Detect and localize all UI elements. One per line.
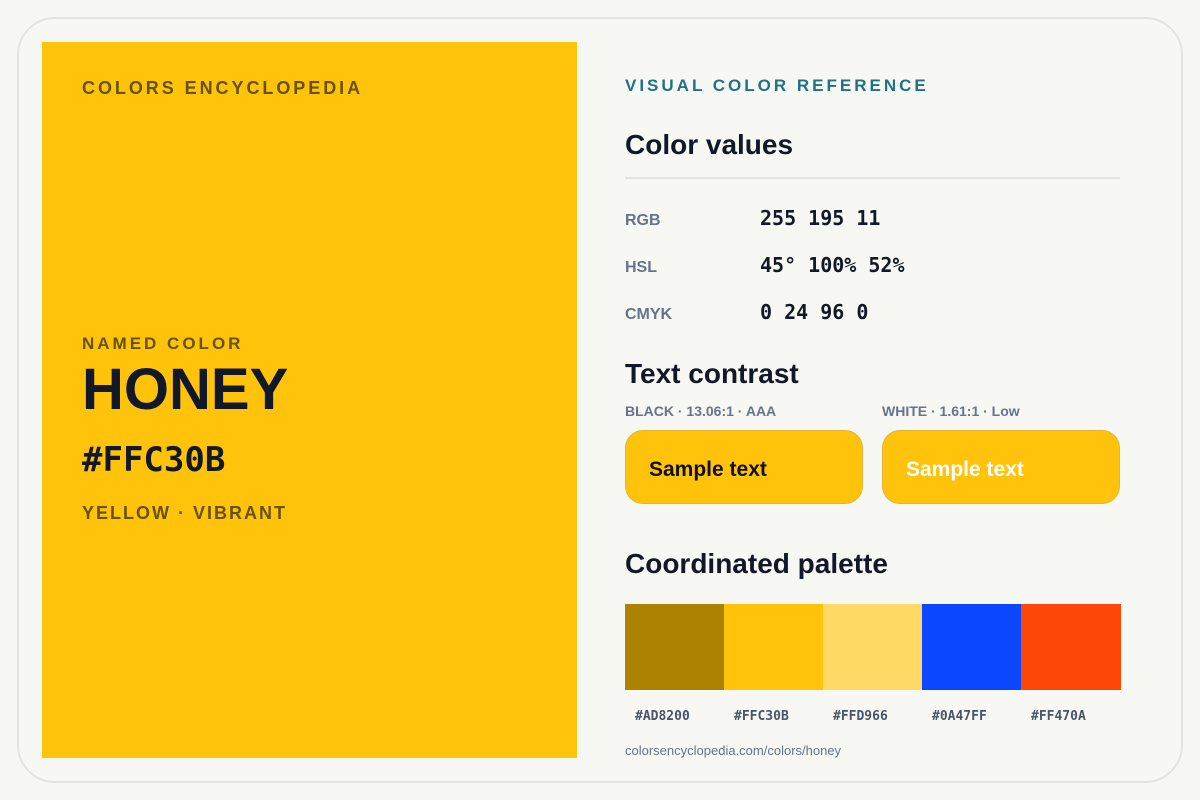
heading: text contrast: Text contrast bbox=[625, 358, 799, 389]
CMYK value: 0 24 96 0 bbox=[760, 300, 868, 324]
palette hex labels: #0A47FF bbox=[932, 709, 987, 724]
white contrast label: WHITE · 1.61:1 · Low bbox=[882, 403, 1020, 419]
hex code: #FFC30B bbox=[82, 440, 225, 480]
HSL label: HSL bbox=[625, 259, 657, 276]
RGB value: 255 195 11 bbox=[760, 206, 880, 230]
color family tags: YELLOW · VIBRANT bbox=[82, 503, 287, 523]
palette hex labels: #FFD966 bbox=[833, 709, 888, 724]
palette hex labels: #AD8200 bbox=[635, 709, 690, 724]
heading: color values: Color values bbox=[625, 129, 793, 160]
black sample text: Sample text bbox=[649, 458, 767, 481]
named color label: NAMED COLOR bbox=[82, 334, 243, 353]
palette hex labels bbox=[635, 709, 1086, 724]
heading: coordinated palette: Coordinated palette bbox=[625, 548, 888, 579]
palette hex labels: #FFC30B bbox=[734, 709, 789, 724]
RGB label: RGB bbox=[625, 212, 661, 229]
brand label: COLORS ENCYCLOPEDIA bbox=[82, 78, 363, 98]
divider bbox=[625, 177, 1120, 179]
color values table bbox=[625, 206, 904, 324]
color name title: HONEY bbox=[82, 357, 288, 422]
black contrast label: BLACK · 13.06:1 · AAA bbox=[625, 403, 776, 419]
white sample text: Sample text bbox=[906, 458, 1024, 481]
panel: color swatch bbox=[42, 42, 577, 758]
white sample card bbox=[882, 430, 1120, 504]
palette hex labels: #FF470A bbox=[1031, 709, 1086, 724]
source url: colorsencyclopedia.com/colors/honey bbox=[625, 743, 841, 758]
black sample card bbox=[625, 430, 863, 504]
CMYK label: CMYK bbox=[625, 306, 672, 323]
HSL value: 45° 100% 52% bbox=[760, 253, 904, 277]
palette swatches bbox=[625, 604, 1121, 690]
section eyebrow: VISUAL COLOR REFERENCE bbox=[625, 76, 929, 95]
